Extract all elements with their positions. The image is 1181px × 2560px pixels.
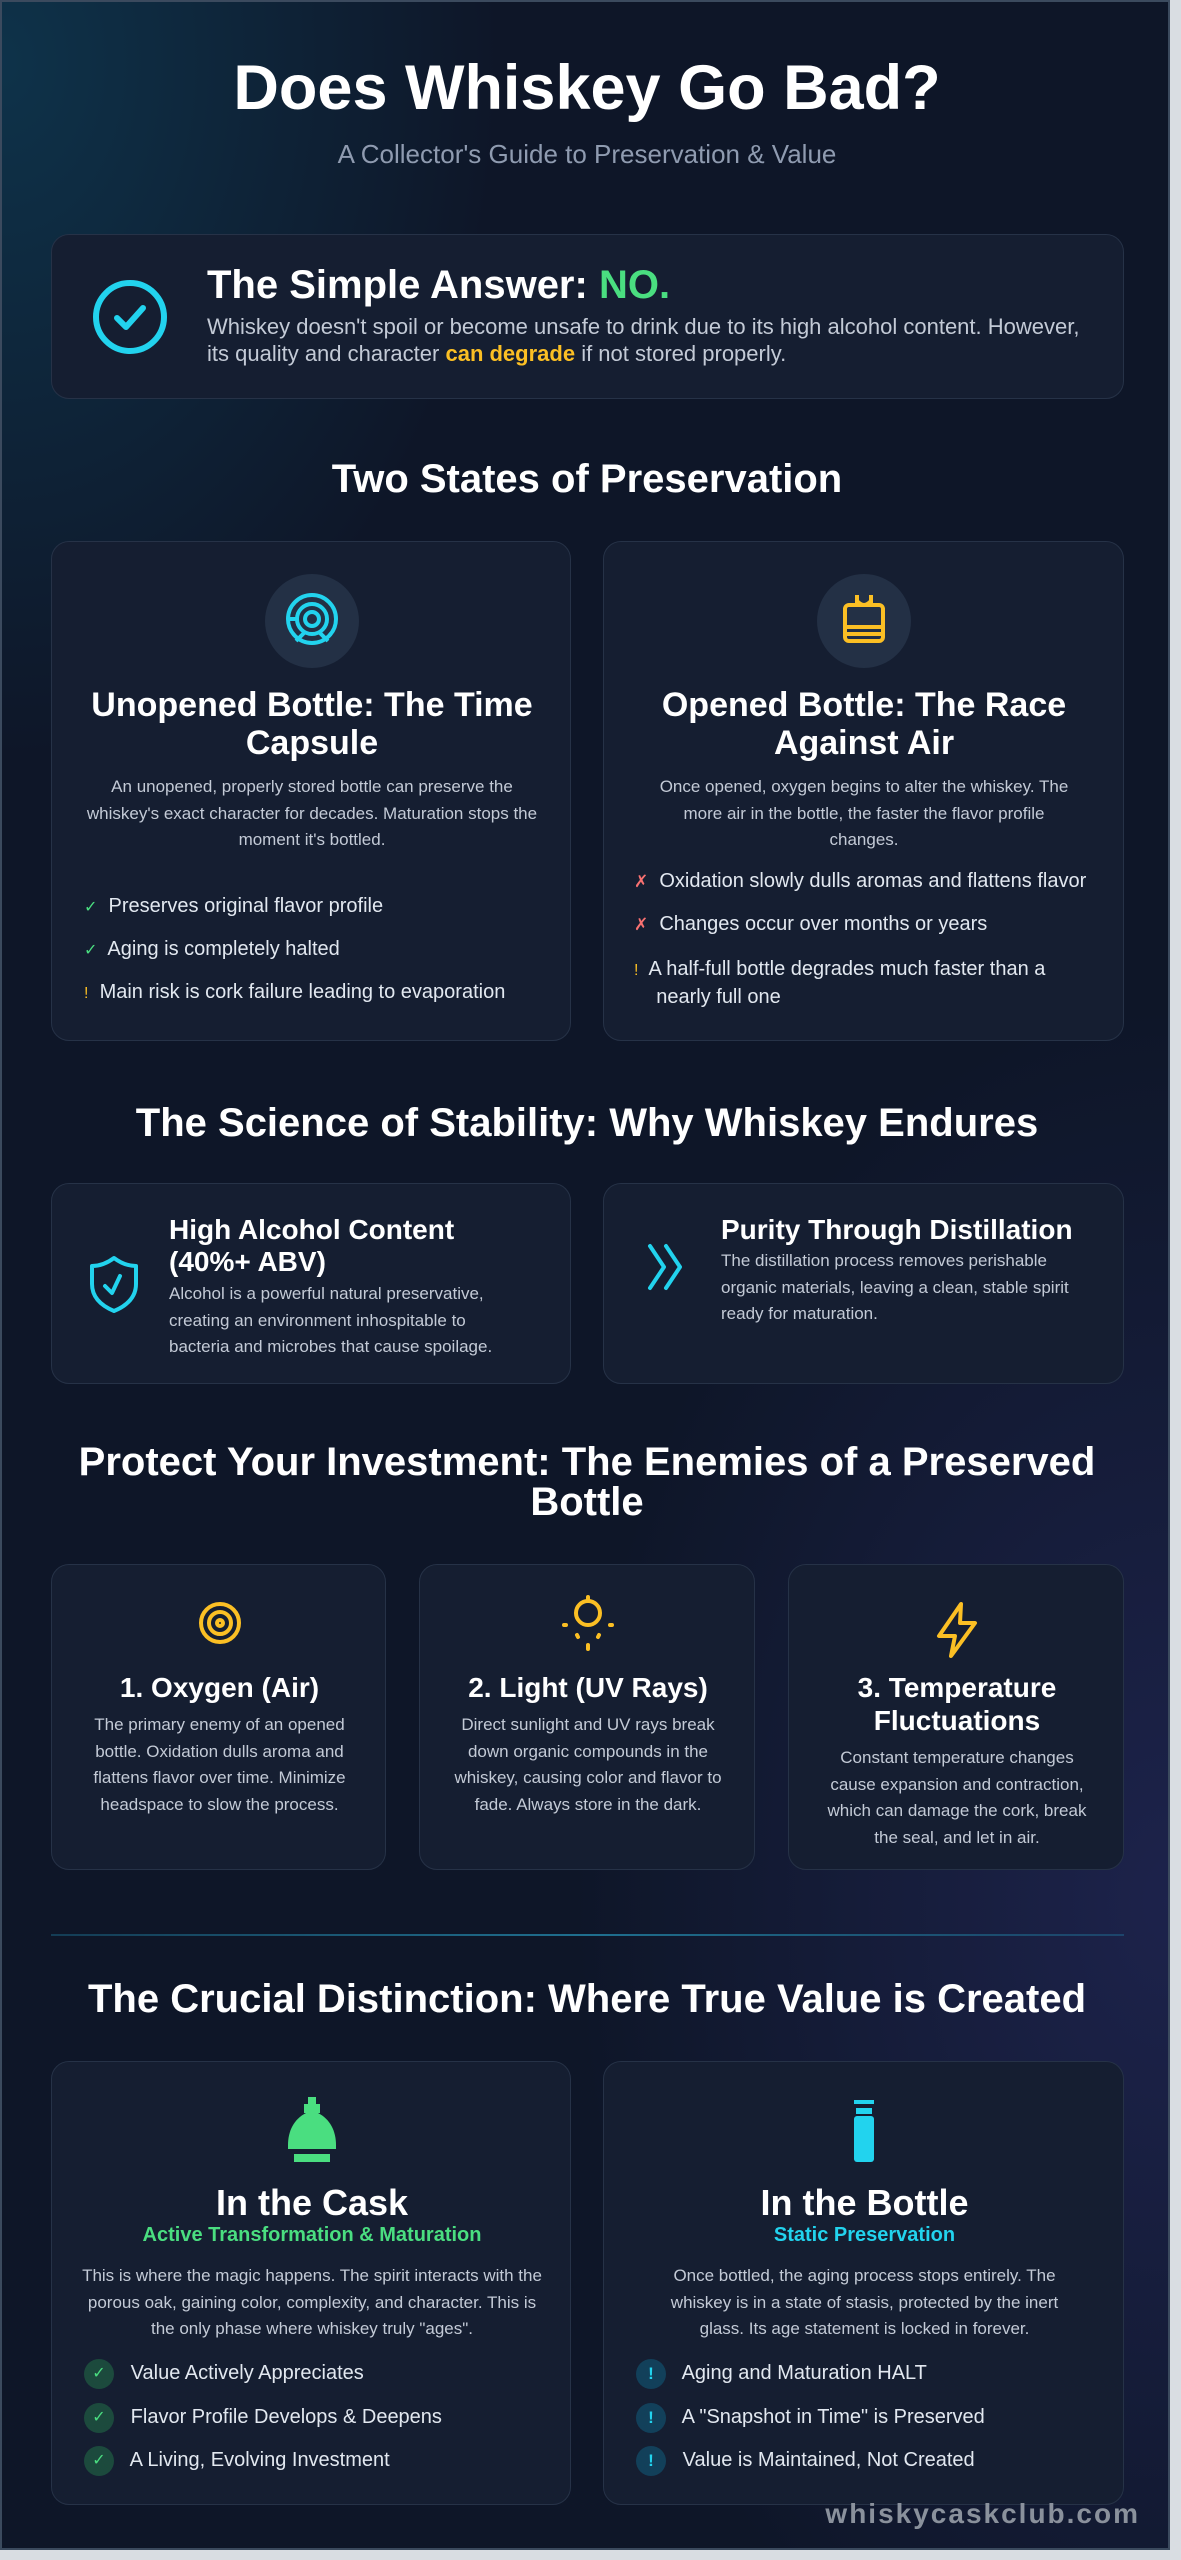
list: ! Main risk is cork failure leading to evaporation xyxy=(84,981,505,1003)
description: Once opened, oxygen begins to alter the whiskey. The more air in the bottle, the faster the flavor profile changes. xyxy=(660,777,1068,849)
heading: The Simple Answer: NO. xyxy=(207,263,670,307)
icon: sun xyxy=(562,1595,614,1651)
description: An unopened, properly stored bottle can preserve the whiskey's exact character for decades. Maturation stops the moment it's bottled. xyxy=(87,777,537,849)
list: Flavor Profile Develops & Deepens xyxy=(131,2406,442,2428)
list: ! xyxy=(648,2451,654,2470)
text: Direct sunlight and UV rays break down organic compounds in the whiskey, causing color and flavor to fade. Always store in the dark. xyxy=(454,1715,722,1814)
text: Constant temperature changes cause expansion and contraction, which can damage the cork, break the seal, and let in air. xyxy=(828,1748,1086,1846)
list: ✓ xyxy=(92,2452,106,2469)
panel: oxygen xyxy=(51,1564,386,1870)
list xyxy=(634,870,1086,1008)
icon: time capsule xyxy=(265,574,359,668)
subtitle: Active Transformation & Maturation xyxy=(143,2224,481,2246)
text: The distillation process removes perishable organic materials, leaving a clean, stable spirit ready for maturation. xyxy=(721,1251,1069,1323)
text: The primary enemy of an opened bottle. Oxidation dulls aroma and flattens flavor over time. Minimize headspace to slow the process. xyxy=(93,1715,346,1814)
title: Purity Through Distillation xyxy=(721,1214,1073,1245)
list: ✓ Aging is completely halted xyxy=(84,938,340,960)
subtitle: A Collector's Guide to Preservation & Value xyxy=(338,139,836,169)
list: ! xyxy=(648,2364,654,2383)
title: 1. Oxygen (Air) xyxy=(120,1672,319,1703)
title: 3. Temperature Fluctuations xyxy=(858,1672,1056,1736)
panel: unopened xyxy=(51,541,571,1041)
list: A "Snapshot in Time" is Preserved xyxy=(682,2406,985,2428)
list xyxy=(84,2359,442,2476)
list: nearly full one xyxy=(656,986,781,1008)
panel: purity xyxy=(603,1183,1124,1384)
panel: temperature xyxy=(788,1564,1124,1870)
text: Whiskey doesn't spoil or become unsafe to drink due to its high alcohol content. However, its quality and character can degrade if not stored properly. xyxy=(207,314,1079,366)
panel: opened xyxy=(603,541,1124,1041)
watermark: whiskycaskclub.com xyxy=(825,2498,1140,2529)
list: ✓ xyxy=(92,2409,106,2426)
heading: protect: Protect Your Investment: The Enemies of a Preserved Bottle xyxy=(79,1440,1095,1524)
icon: bottle xyxy=(854,2100,874,2162)
list: ! A half-full bottle degrades much faster than a xyxy=(634,958,1045,980)
list: ! xyxy=(648,2408,654,2427)
icon: target xyxy=(199,1602,241,1644)
heading: science: The Science of Stability: Why Whiskey Endures xyxy=(136,1101,1038,1145)
heading: two states: Two States of Preservation xyxy=(332,457,842,501)
panel: in the cask xyxy=(51,2061,571,2505)
icon: cask still xyxy=(288,2097,336,2162)
heading: Unopened Bottle: The Time Capsule xyxy=(91,686,533,762)
panel: simple answer xyxy=(51,234,1124,399)
text: Alcohol is a powerful natural preservative, creating an environment inhospitable to bacteria and microbes that cause spoilage. xyxy=(169,1284,492,1356)
list: ✗ Changes occur over months or years xyxy=(634,913,987,935)
list: Aging and Maturation HALT xyxy=(682,2362,927,2384)
list xyxy=(636,2359,985,2476)
title: In the Cask xyxy=(216,2182,408,2223)
heading: Opened Bottle: The Race Against Air xyxy=(662,686,1066,762)
icon: shield xyxy=(90,1256,138,1313)
title: 2. Light (UV Rays) xyxy=(468,1672,708,1703)
heading: crucial distinction: The Crucial Distinction: Where True Value is Created xyxy=(88,1977,1086,2021)
list: Value Actively Appreciates xyxy=(131,2362,364,2384)
panel: light xyxy=(419,1564,755,1870)
list: ✗ Oxidation slowly dulls aromas and flattens flavor xyxy=(634,870,1086,892)
list: ✓ xyxy=(92,2365,106,2382)
title: In the Bottle xyxy=(760,2182,968,2223)
subtitle: Static Preservation xyxy=(774,2224,955,2246)
icon: opened bottle xyxy=(817,574,911,668)
title: High Alcohol Content (40%+ ABV) xyxy=(169,1214,454,1277)
icon: lightning xyxy=(936,1602,978,1658)
icon: check circle xyxy=(93,280,167,354)
list: Value is Maintained, Not Created xyxy=(683,2449,975,2471)
panel: in the bottle xyxy=(603,2061,1124,2505)
panel: high alcohol xyxy=(51,1183,571,1384)
description: Once bottled, the aging process stops entirely. The whiskey is in a state of stasis, protected by the inert glass. Its age statement is locked in forever. xyxy=(671,2266,1058,2338)
title: Does Whiskey Go Bad? xyxy=(233,53,941,123)
list: A Living, Evolving Investment xyxy=(130,2449,390,2471)
list xyxy=(84,895,505,1003)
icon: chevrons xyxy=(648,1244,682,1290)
list: ✓ Preserves original flavor profile xyxy=(84,895,383,917)
description: This is where the magic happens. The spirit interacts with the porous oak, gaining color, complexity, and character. This is the only phase where whiskey truly "ages". xyxy=(82,2266,542,2338)
